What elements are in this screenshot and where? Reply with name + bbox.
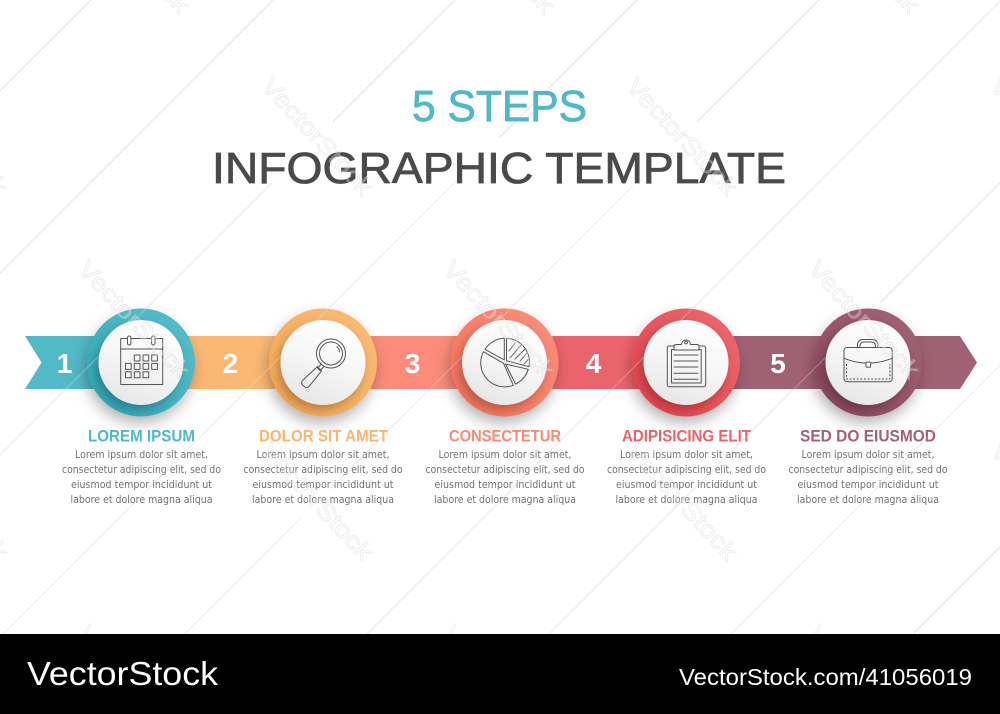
step 3 description: [426, 449, 584, 506]
icon: clipboard: [667, 340, 706, 387]
watermark text repeats: VectorStock: [255, 438, 378, 567]
step 4 description: Lorem ipsum dolor sit amet,: [620, 449, 753, 461]
step 5 text: [788, 426, 948, 506]
step 5 description: labore et dolore magna aliqua: [797, 494, 939, 506]
step 1 description: [62, 449, 221, 506]
watermark text repeats: Vec: [73, 621, 120, 668]
step 5 description: consectetur adipiscing elit, sed do: [788, 464, 948, 476]
step 4 description: consectetur adipiscing elit, sed do: [607, 464, 766, 476]
step numbers: 5: [770, 348, 786, 379]
watermark text repeats: VectorStock: [72, 256, 195, 385]
step numbers: 3: [405, 348, 420, 379]
step 1 description: labore et dolore magna aliqua: [70, 494, 212, 506]
ribbon segment 4: [553, 336, 735, 389]
watermark text repeats: VectorStock: [802, 256, 925, 385]
watermark text repeats: VectorStock: [255, 73, 378, 202]
title line: 5 steps: 5 STEPS: [412, 82, 587, 131]
footer brand name: VectorStock: [27, 655, 219, 692]
step numbers: [57, 348, 786, 379]
icon: pie chart: [481, 338, 529, 387]
step numbers: 1: [57, 348, 72, 379]
step 1 heading: LOREM IPSUM: [88, 426, 195, 446]
step 4 description: [607, 449, 766, 506]
step 2 circle: [269, 308, 377, 416]
footer bar: [0, 634, 1000, 714]
step 3 description: Lorem ipsum dolor sit amet,: [438, 449, 572, 461]
ribbon arrow: [25, 336, 977, 389]
step 5 circle: [814, 308, 922, 416]
step 4 text: [607, 426, 766, 506]
step 2 description: eiusmod tempor incididunt ut: [252, 479, 394, 491]
step 2 description: labore et dolore magna aliqua: [252, 494, 394, 506]
step numbers: 4: [586, 348, 602, 379]
step 2 text: [244, 426, 402, 506]
step 1 description: Lorem ipsum dolor sit amet,: [75, 449, 208, 461]
icon: magnifying glass: [302, 339, 346, 388]
ribbon segment 1: [25, 336, 190, 389]
step 1 circle: [87, 308, 195, 416]
step 3 heading: CONSECTETUR: [449, 426, 561, 446]
step 5 heading: SED DO EIUSMOD: [800, 426, 936, 446]
ribbon segment 3: [371, 336, 554, 389]
step 4 heading: ADIPISICING ELIT: [622, 426, 752, 446]
step 5 description: [788, 449, 948, 506]
title: [212, 82, 786, 193]
step numbers: 2: [223, 348, 238, 379]
watermark text repeats: Vec: [438, 621, 485, 668]
step 3 description: consectetur adipiscing elit, sed do: [426, 464, 584, 476]
icon: calendar: [121, 336, 163, 384]
step 1 description: consectetur adipiscing elit, sed do: [62, 464, 221, 476]
step 5 description: eiusmod tempor incididunt ut: [798, 479, 938, 491]
ribbon segment 5 with arrow head: [734, 336, 977, 389]
step 3 description: eiusmod tempor incididunt ut: [434, 479, 576, 491]
watermark text repeats: VectorStock: [620, 438, 743, 567]
step 4 description: eiusmod tempor incididunt ut: [616, 479, 757, 491]
watermark text repeats: Vec: [803, 621, 850, 668]
step 2 description: consectetur adipiscing elit, sed do: [244, 464, 402, 476]
footer image id: VectorStock.com/41056019: [679, 664, 972, 690]
step 4 description: labore et dolore magna aliqua: [616, 494, 758, 506]
step 3 description: labore et dolore magna aliqua: [434, 494, 576, 506]
watermark text repeats: VectorStock: [437, 256, 560, 385]
step 4 circle: [632, 308, 740, 416]
step 3 text: [426, 426, 584, 506]
step 5 description: Lorem ipsum dolor sit amet,: [802, 449, 934, 461]
step 1 text: [62, 426, 221, 506]
title line: infographic template: INFOGRAPHIC TEMPLATE: [212, 144, 786, 193]
ribbon segment 2: [189, 336, 372, 389]
step 2 description: [244, 449, 402, 506]
icon: briefcase: [844, 340, 892, 382]
step 1 description: eiusmod tempor incididunt ut: [71, 479, 212, 491]
step 2 description: Lorem ipsum dolor sit amet,: [256, 449, 390, 461]
watermark text repeats: VectorStock: [620, 73, 743, 202]
step 2 heading: DOLOR SIT AMET: [259, 426, 389, 446]
step 3 circle: [450, 308, 558, 416]
